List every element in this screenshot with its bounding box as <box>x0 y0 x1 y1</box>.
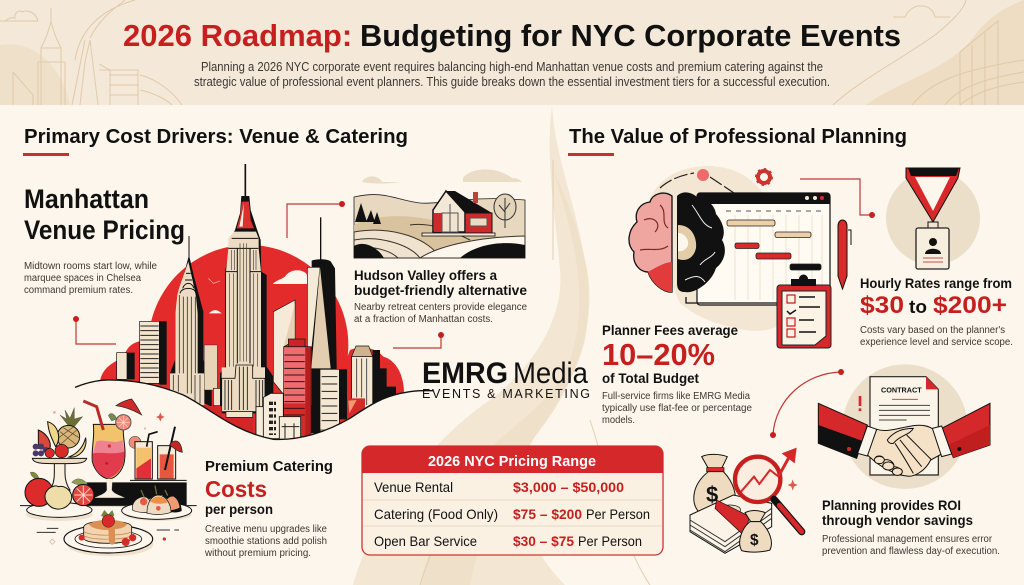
small left building <box>117 353 127 379</box>
black under towers <box>311 405 321 433</box>
gantt window <box>697 193 830 305</box>
intro text: Planning a 2026 NYC corporate event requires balancing high-end Manhattan venue costs and premium catering against the <box>201 60 823 74</box>
pricing table: Venue Rental <box>374 479 453 495</box>
catering text: without premium pricing. <box>204 548 311 559</box>
pricing table: $3,000 – $50,000 <box>513 479 624 495</box>
empire state building <box>220 164 273 413</box>
hourly rates text: $200+ <box>933 292 1007 319</box>
catering text: Creative menu upgrades like <box>205 524 327 535</box>
planner fees text: models. <box>602 415 635 426</box>
header band <box>0 0 1024 105</box>
icon: money and magnifier: $ <box>750 532 759 549</box>
ROI text: through vendor savings <box>822 512 973 528</box>
icon: money and magnifier: $ <box>706 482 718 507</box>
planner fees text <box>602 322 752 426</box>
cloud <box>273 270 307 284</box>
logo: EMRG Media: EMRG <box>422 357 508 390</box>
logo: EMRG Media: EVENTS & MARKETING <box>422 387 590 401</box>
ROI text <box>822 497 1000 557</box>
left sleeve <box>818 403 867 458</box>
right sleeve <box>942 403 990 458</box>
pen <box>838 220 847 289</box>
one world trade <box>307 217 337 407</box>
pricing table: Per Person <box>578 533 642 549</box>
hourly rates text <box>860 275 1013 348</box>
heading: value of planning: The Value of Professional Planning <box>569 125 907 148</box>
title: 2026 Roadmap: <box>123 18 352 53</box>
connector: arc <box>770 369 844 438</box>
pancake plate <box>64 510 153 553</box>
pricing table: 2026 NYC Pricing Range <box>428 454 596 470</box>
hourly rates text: Costs vary based on the planner's <box>860 325 1005 336</box>
foreground curve <box>70 380 433 453</box>
icon: money and magnifier <box>690 448 802 553</box>
planning illustration: brain, gantt, clipboard <box>629 166 851 348</box>
manhattan venue text: Venue Pricing <box>24 215 185 245</box>
hudson text <box>354 267 527 325</box>
fruit stand <box>32 408 87 490</box>
connector: hudson top <box>287 201 345 238</box>
fruit plate <box>25 472 94 517</box>
line to clipboard <box>686 297 780 303</box>
tree <box>494 194 516 220</box>
planner fees text: typically use flat-fee or percentage <box>602 403 752 414</box>
small bag <box>745 510 765 522</box>
connector: logo <box>393 332 444 348</box>
manhattan venue text: Midtown rooms start low, while <box>24 261 157 272</box>
ROI text: Planning provides ROI <box>822 497 961 513</box>
background waves <box>353 105 650 585</box>
hourly rates text: $30 <box>860 292 904 319</box>
heading: primary cost drivers: Primary Cost Drivers: Venue & Catering <box>24 125 408 148</box>
ROI text: prevention and flawless day-of execution. <box>822 546 1000 557</box>
catering illustration <box>20 399 197 556</box>
small drinks <box>129 427 182 479</box>
brain <box>629 193 672 292</box>
pricing table: $75 – $200 <box>513 506 582 522</box>
cocktail <box>83 399 142 498</box>
manhattan venue text <box>24 184 185 296</box>
pricing table: Open Bar Service <box>374 533 477 549</box>
catering text: Costs <box>205 476 267 502</box>
skyline illustration <box>70 164 433 453</box>
house <box>422 191 495 236</box>
planner fees text: Full-service firms like EMRG Media <box>602 391 750 402</box>
pricing table: Per Person <box>586 506 650 522</box>
icon: contract handshake: CONTRACT <box>881 385 922 394</box>
intro text <box>194 60 830 89</box>
cash stack <box>690 495 772 553</box>
hourly rates text: to <box>909 297 927 317</box>
icon: lanyard badge <box>886 168 980 269</box>
connector: hourly rates <box>800 179 875 218</box>
black table <box>87 482 187 505</box>
planner fees text: 10–20% <box>602 337 715 372</box>
hourly rates text: experience level and service scope. <box>860 337 1013 348</box>
red base blocks <box>203 406 253 435</box>
title dark part: Budgeting for NYC Corporate Events <box>360 18 901 53</box>
manhattan venue text: marquee spaces in Chelsea <box>24 273 141 284</box>
planner fees text: Planner Fees average <box>602 322 738 338</box>
striped building <box>140 321 167 385</box>
hudson text: Hudson Valley offers a <box>354 267 497 283</box>
striped tower <box>320 369 347 430</box>
hourly rates text: Hourly Rates range from <box>860 275 1012 291</box>
right tower <box>347 346 396 421</box>
planner fees text: of Total Budget <box>602 370 699 386</box>
hudson text: at a fraction of Manhattan costs. <box>354 314 493 325</box>
red building <box>284 339 311 437</box>
catering text <box>204 459 333 559</box>
tan behind <box>204 345 217 390</box>
hudson valley illustration <box>354 169 525 258</box>
manhattan venue text: Manhattan <box>24 184 149 214</box>
red sun and clouds <box>100 245 417 445</box>
logo: EMRG Media: Media <box>513 357 588 390</box>
sushi plate <box>122 486 192 519</box>
shadows <box>26 508 93 521</box>
small accents <box>37 528 179 532</box>
pricing table <box>362 446 663 555</box>
intro text: strategic value of professional event planners. This guide breaks down the essential investment tiers for a successful execution. <box>194 75 830 89</box>
catering text: Premium Catering <box>205 459 333 475</box>
connector: venue <box>73 316 116 344</box>
hudson text: budget-friendly alternative <box>354 282 527 298</box>
front low buildings <box>256 393 301 441</box>
chrysler building <box>170 236 212 407</box>
pricing table: Catering (Food Only) <box>374 506 498 522</box>
pricing table: $30 – $75 <box>513 533 574 549</box>
manhattan venue text: command premium rates. <box>24 285 133 296</box>
magnifier <box>735 457 780 502</box>
hands <box>867 425 942 476</box>
icon: contract handshake <box>818 364 990 489</box>
tan glass tower <box>273 300 295 395</box>
logo: EMRG Media <box>422 357 590 401</box>
ROI text: Professional management ensures error <box>822 534 993 545</box>
hudson text: Nearby retreat centers provide elegance <box>354 302 527 313</box>
catering text: smoothie stations add polish <box>205 536 327 547</box>
money bag <box>702 454 727 468</box>
catering text: per person <box>205 502 273 517</box>
clipboard <box>777 285 831 348</box>
